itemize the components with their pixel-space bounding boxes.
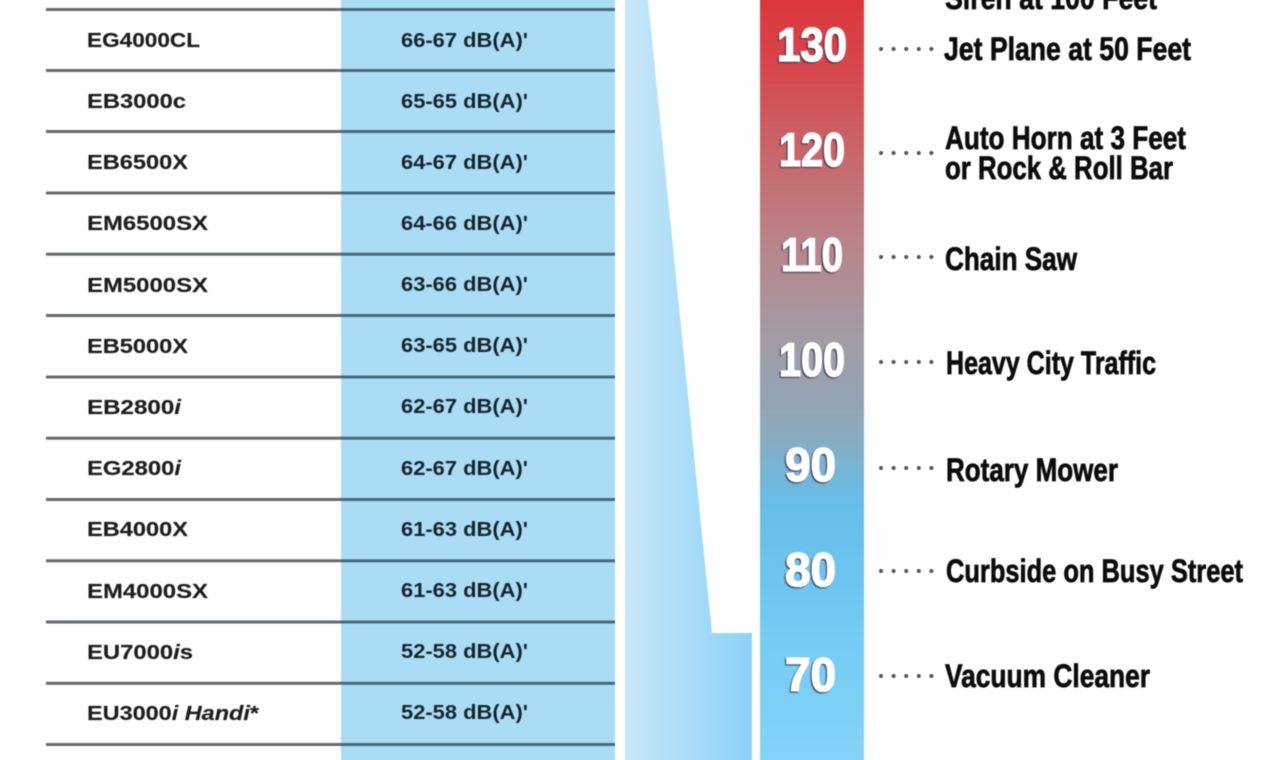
scale numbers: 120: [779, 123, 845, 176]
row: EM5000SX: 63-66 dB(A)': [401, 274, 528, 296]
row: EB5000X: 63-65 dB(A)': [401, 335, 528, 357]
scale numbers: 80: [785, 543, 836, 596]
row: EB6500X: EB6500X: [87, 152, 189, 174]
dotted leaders: [881, 49, 937, 676]
row: EG4000CL: EG4000CL: [87, 30, 200, 52]
row: EU3000i Handi: 52-58 dB(A)': [401, 702, 528, 724]
noise source labels: or Rock & Roll Bar: [945, 150, 1173, 186]
table value column background: [341, 0, 615, 760]
row: EB4000X: [87, 519, 528, 541]
row: EB2800i: 62-67 dB(A)': [401, 396, 528, 418]
row: EB2800i: [87, 396, 528, 419]
row: EB2800i: EB2800 i: [87, 397, 182, 419]
scale numbers: 130: [777, 18, 847, 71]
noise source labels: [944, 0, 1243, 694]
row: EM5000SX: EM5000SX: [87, 275, 209, 297]
noise source labels: Chain Saw: [945, 241, 1077, 277]
row: EB6500X: [87, 152, 528, 174]
row: EG2800i: 62-67 dB(A)': [401, 458, 528, 480]
row: EG2800i: EG2800 i: [87, 458, 182, 480]
wedge connector shape: [625, 0, 752, 760]
row: EB4000X: EB4000X: [87, 519, 189, 541]
noise source labels: Jet Plane at 50 Feet: [944, 31, 1191, 67]
scale numbers: [777, 18, 847, 701]
row: EG4000CL: 66-67 dB(A)': [401, 30, 528, 52]
row: EM6500SX: EM6500SX: [87, 213, 209, 235]
row: EM6500SX: [87, 213, 528, 235]
noise source labels: Rotary Mower: [946, 452, 1118, 488]
row: EU3000i Handi: EU3000 i Handi *: [87, 703, 259, 725]
row: EM4000SX: [87, 580, 528, 603]
noise source labels: Vacuum Cleaner: [945, 658, 1150, 694]
panel: generator noise table: [46, 0, 615, 760]
row: EU7000is: EU7000 is: [87, 642, 193, 664]
row: EU3000i Handi: [87, 702, 528, 725]
row: EG4000CL: [87, 30, 528, 52]
noise source labels: Heavy City Traffic: [946, 345, 1156, 381]
row: EB3000c: [87, 91, 528, 113]
row: EB3000c: 65-65 dB(A)': [401, 91, 528, 113]
row: EU7000is: [87, 641, 528, 664]
table row dividers: [46, 8, 615, 746]
row: EB5000X: EB5000X: [87, 336, 189, 358]
row: EM4000SX: 61-63 dB(A)': [401, 580, 528, 602]
row: EB5000X: [87, 335, 528, 358]
scale numbers: 90: [785, 438, 836, 491]
row: EB6500X: 64-67 dB(A)': [401, 152, 528, 174]
row: EM4000SX: EM4000SX: [87, 581, 209, 603]
row: EB4000X: 61-63 dB(A)': [401, 519, 528, 541]
noise source labels: Auto Horn at 3 Feet: [945, 120, 1186, 156]
row: EM5000SX: [87, 274, 528, 297]
row: EM6500SX: 64-66 dB(A)': [401, 213, 528, 235]
decibel scale bar: [760, 0, 864, 760]
scale numbers: 110: [781, 228, 843, 281]
row: EU7000is: 52-58 dB(A)': [401, 641, 528, 663]
row: EG2800i: [87, 458, 528, 480]
scale numbers: 70: [785, 648, 836, 701]
row: EB3000c: EB3000c: [87, 91, 186, 113]
scale numbers: 100: [779, 333, 845, 386]
